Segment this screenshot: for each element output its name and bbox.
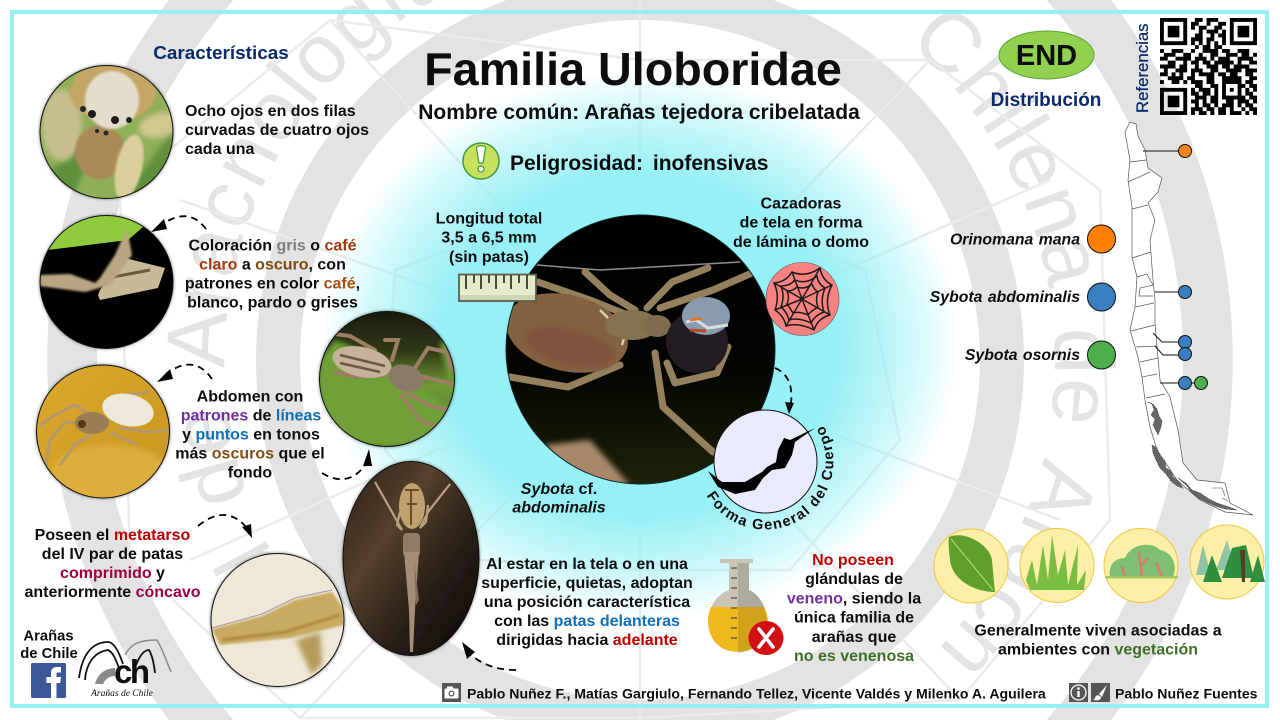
legend: species: Sybota osornis xyxy=(965,347,1080,364)
title: Familia Uloboridae xyxy=(424,43,842,95)
text: abdomen: más oscuros que el xyxy=(175,446,325,462)
QR code xyxy=(1160,18,1257,115)
icon: END badge: END xyxy=(1016,40,1077,72)
curved label: Forma General del Cuerpo xyxy=(707,427,834,530)
text: ojos: Ocho ojos en dos filas xyxy=(185,103,356,120)
logo: Arañas de Chile xyxy=(79,640,171,699)
danger level xyxy=(463,143,768,179)
text: venom: no es venenosa xyxy=(794,648,914,665)
text: venom: única familia de xyxy=(794,610,914,626)
text: abdomen: patrones de líneas xyxy=(181,408,321,424)
text: venom: glándulas de xyxy=(805,571,903,588)
heading: características: Características xyxy=(153,43,289,64)
credit text: Pablo Nuñez Fuentes xyxy=(1115,686,1258,702)
text: metatarso: del IV par de patas xyxy=(42,546,183,563)
habitat icon: shrub xyxy=(1104,528,1178,602)
text: longitud total: (sin patas) xyxy=(449,249,529,266)
text: posture: con las patas delanteras xyxy=(494,613,680,630)
central cyan glow xyxy=(320,70,960,620)
photo: spider on yellow surface xyxy=(36,364,170,505)
map of Chile with regions xyxy=(1125,122,1253,515)
text: coloración: claro a oscuro, con xyxy=(199,256,346,274)
legend: species xyxy=(930,225,1116,369)
text: coloración: blanco, pardo o grises xyxy=(187,294,358,312)
text: venom: No poseen xyxy=(812,552,894,569)
legend: species: Orinomana mana xyxy=(950,232,1080,248)
photo: elongated spider xyxy=(342,460,480,658)
text: posture: una posición característica xyxy=(484,594,690,611)
arrow xyxy=(157,365,212,382)
text: habitat: Generalmente viven asociadas a xyxy=(974,622,1222,640)
icon: brush xyxy=(1091,683,1110,702)
label: referencias: Referencias xyxy=(1133,23,1152,113)
credit: photo xyxy=(442,683,1046,702)
legend: species: Sybota abdominalis xyxy=(930,289,1080,306)
icon: facebook xyxy=(31,663,66,698)
text: coloración: Coloración gris o café xyxy=(188,238,357,254)
text: abdomen: fondo xyxy=(228,464,272,482)
habitat icon: grass xyxy=(1020,528,1094,602)
text: coloración: patrones en color café, xyxy=(185,276,360,292)
text: ojos: cada una xyxy=(185,141,254,158)
map markers xyxy=(1143,144,1208,390)
text: metatarso: anteriormente cóncavo xyxy=(24,584,201,601)
text: venom: arañas que xyxy=(812,629,896,646)
icon: ruler xyxy=(459,274,536,301)
heading: distribución: Distribución xyxy=(991,90,1101,111)
text: cazadoras: de lámina o domo xyxy=(733,234,869,251)
text: metatarso: comprimido y xyxy=(60,565,165,582)
habitat icon: forest xyxy=(1190,525,1265,599)
Arañas de Chile label: de Chile xyxy=(20,646,78,662)
text: ojos: curvadas de cuatro ojos xyxy=(185,122,369,139)
photo: spider eyes xyxy=(40,62,184,202)
icon: spider web xyxy=(766,262,839,336)
caption: species: Sybota cf. xyxy=(521,481,597,498)
icon: poison flask with cross xyxy=(708,559,784,655)
icon: info xyxy=(1069,683,1088,702)
arrow xyxy=(322,449,372,479)
habitat icon: leaf xyxy=(934,529,1008,603)
arrow xyxy=(775,368,794,414)
danger text: Peligrosidad: inofensivas xyxy=(510,152,768,175)
photo: metatarsus xyxy=(210,553,346,689)
Arañas de Chile label: Arañas xyxy=(23,628,74,644)
credit text: Pablo Nuñez F., Matías Gargiulo, Fernando Tellez, Vicente Valdés y Milenko A. Aguilera xyxy=(467,686,1046,702)
text: posture: Al estar en la tela o en una xyxy=(486,556,688,573)
caption: species: abdominalis xyxy=(512,500,606,516)
text: longitud total: Longitud total xyxy=(436,210,542,228)
text: cazadoras: Cazadoras xyxy=(761,196,842,212)
icon: general body shape xyxy=(708,410,817,513)
photo: spider on leaf, lateral view xyxy=(40,215,174,349)
text: abdomen: Abdomen con xyxy=(197,388,303,406)
icon: camera xyxy=(442,683,461,702)
text: habitat: ambientes con vegetación xyxy=(998,642,1198,658)
arrow xyxy=(198,515,252,538)
text: posture: superficie, quietas, adoptan xyxy=(481,575,693,592)
common name: Nombre común: Arañas tejedora cribelatada xyxy=(418,101,860,124)
arrow xyxy=(151,216,206,232)
text: posture: dirigidas hacia adelante xyxy=(496,632,678,649)
photo: grey spider on green leaf xyxy=(319,311,455,447)
text: abdomen: y puntos en tonos xyxy=(182,426,320,444)
logo: Arañas de Chile: Arañas de Chile xyxy=(90,689,153,699)
arrow xyxy=(462,642,516,670)
icon: END badge xyxy=(999,31,1094,79)
icon: warning xyxy=(463,143,499,179)
logo: Arañas de Chile: ch xyxy=(114,653,149,690)
main photo: Sybota cf. abdominalis xyxy=(498,215,775,485)
text: metatarso: Poseen el metatarso xyxy=(35,527,190,544)
text: venom: veneno, siendo la xyxy=(787,590,921,608)
credit: illustration xyxy=(1069,683,1258,702)
text: longitud total: 3,5 a 6,5 mm xyxy=(441,230,537,246)
text: cazadoras: de tela en forma xyxy=(740,214,862,232)
